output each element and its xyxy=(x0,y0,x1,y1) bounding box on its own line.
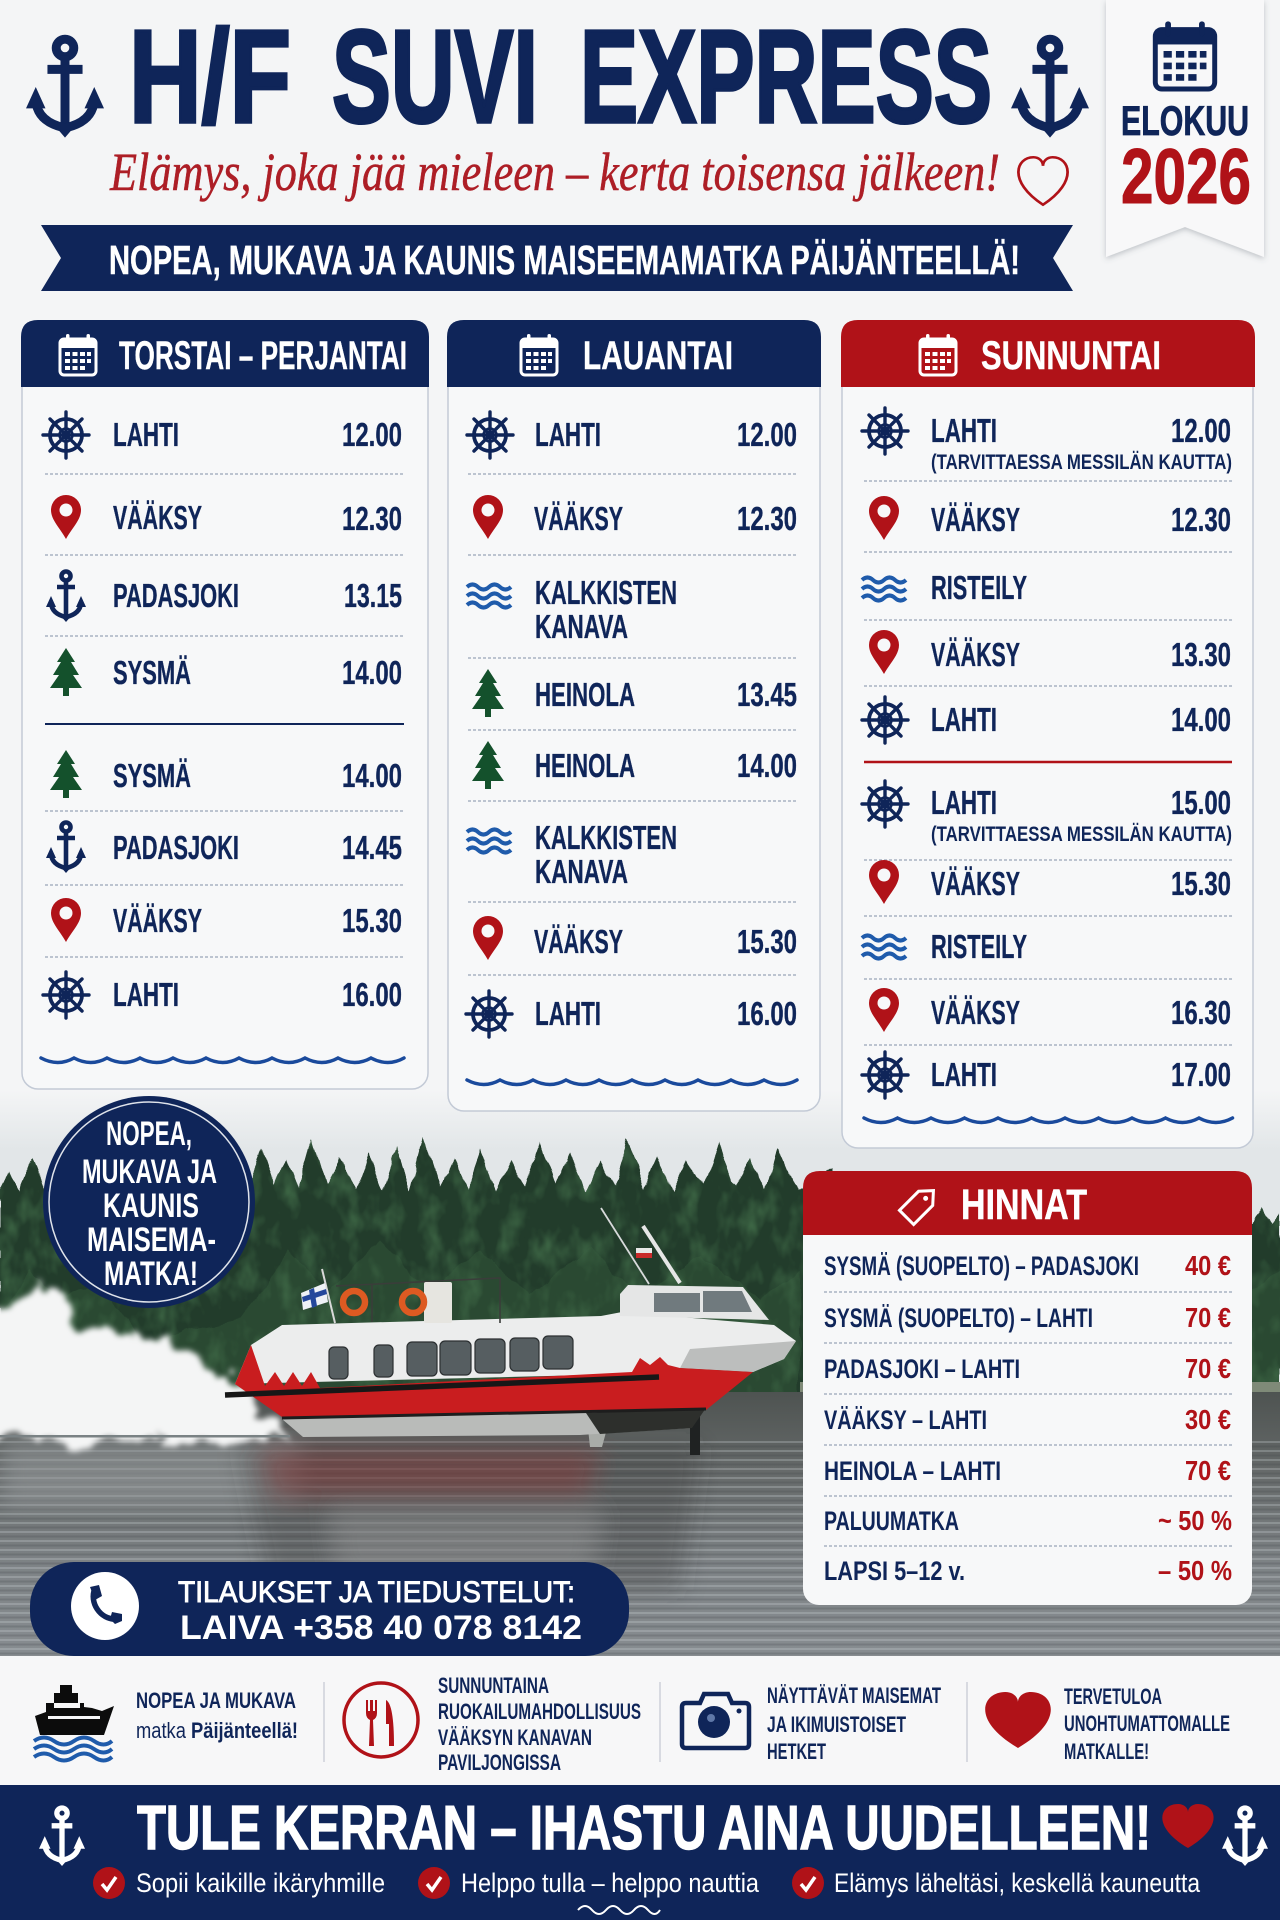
price row: HEINOLA – LAHTI xyxy=(824,1456,1001,1486)
feature text: MATKALLE! xyxy=(1064,1739,1149,1764)
row: 16.00 xyxy=(342,976,402,1013)
row: PADASJOKI xyxy=(113,577,239,614)
badge: circle slogan: NOPEA, xyxy=(106,1115,192,1153)
badge: circle slogan: MATKA! xyxy=(104,1255,198,1293)
icon: heart outline xyxy=(1018,157,1068,205)
icon: heart xyxy=(985,1692,1051,1748)
row xyxy=(473,495,797,539)
title: EXPRESS xyxy=(580,3,992,150)
price row xyxy=(824,1353,1231,1384)
water splash xyxy=(0,1276,290,1442)
price row: LAPSI 5–12 v. xyxy=(824,1556,965,1586)
lifebuoys xyxy=(343,1291,424,1313)
row xyxy=(51,495,402,539)
icon: footer heart xyxy=(1162,1804,1214,1848)
row: HEINOLA xyxy=(535,676,635,713)
phone pill: LAIVA +358 40 078 8142 xyxy=(180,1609,582,1647)
feature text: PAVILJONGISSA xyxy=(438,1750,561,1775)
row: VÄÄKSY xyxy=(534,500,623,537)
panel header: SUNNUNTAI xyxy=(981,334,1161,378)
icon: calendar xyxy=(1155,21,1215,89)
row xyxy=(46,572,402,622)
price row: ~ 50 % xyxy=(1158,1505,1232,1536)
row: LAHTI xyxy=(535,995,601,1032)
row: VÄÄKSY xyxy=(931,636,1020,673)
finnish flag xyxy=(301,1283,328,1310)
feature text xyxy=(136,1688,298,1743)
photo: hydrofoil on lake xyxy=(0,1090,1280,1660)
icon: right anchor xyxy=(1011,39,1089,138)
icon: left anchor xyxy=(26,39,104,138)
row xyxy=(862,408,1232,474)
icon: price tag xyxy=(899,1183,941,1225)
row: HEINOLA xyxy=(535,747,635,784)
icon: ship xyxy=(34,1685,114,1760)
prices header: HINNAT xyxy=(961,1181,1087,1229)
row xyxy=(467,819,677,890)
row: 13.45 xyxy=(737,676,797,713)
row: 12.30 xyxy=(1171,501,1231,538)
row: LAHTI xyxy=(931,701,997,738)
row xyxy=(43,412,402,458)
price row: PALUUMATKA xyxy=(824,1506,959,1536)
feature text: HETKET xyxy=(767,1739,826,1764)
row: 13.15 xyxy=(344,577,402,614)
row xyxy=(869,630,1231,674)
row xyxy=(50,750,402,798)
title xyxy=(129,3,992,150)
row xyxy=(862,569,1027,606)
feature text xyxy=(438,1673,641,1775)
price row: VÄÄKSY – LAHTI xyxy=(824,1405,987,1435)
price row: 70 € xyxy=(1185,1302,1231,1333)
footer band xyxy=(0,1785,1280,1920)
feature text xyxy=(1064,1684,1230,1764)
row: SYSMÄ xyxy=(113,654,191,691)
script tagline: Elämys, joka jää mieleen – kerta toisensa jälkeen! xyxy=(109,142,1000,202)
row xyxy=(869,496,1231,540)
row: 12.00 xyxy=(737,416,797,453)
icon: camera xyxy=(682,1694,749,1748)
row: 15.30 xyxy=(737,923,797,960)
row: KALKKISTEN xyxy=(535,574,677,611)
panel header xyxy=(21,320,429,387)
row: PADASJOKI xyxy=(113,829,239,866)
row: 15.30 xyxy=(1171,865,1231,902)
panel header xyxy=(447,320,821,387)
row xyxy=(862,928,1027,965)
row: RISTEILY xyxy=(931,569,1027,606)
row xyxy=(472,669,797,717)
check item: Elämys läheltäsi, keskellä kauneutta xyxy=(834,1868,1201,1898)
price row: 70 € xyxy=(1185,1455,1231,1486)
row xyxy=(473,916,797,960)
row xyxy=(862,781,1232,846)
panel: lauantai xyxy=(447,320,821,1111)
row: 17.00 xyxy=(1171,1056,1231,1093)
row xyxy=(467,412,797,458)
row xyxy=(472,741,797,789)
row: VÄÄKSY xyxy=(113,902,202,939)
boat reflection xyxy=(240,1445,700,1590)
badge: circle slogan: MUKAVA JA xyxy=(82,1153,217,1191)
row xyxy=(862,1052,1231,1098)
price row: 70 € xyxy=(1185,1353,1231,1384)
banner xyxy=(41,225,1073,291)
panel header xyxy=(841,320,1255,387)
row: LAHTI xyxy=(113,416,179,453)
badge: circle slogan xyxy=(43,1096,255,1308)
row: VÄÄKSY xyxy=(931,994,1020,1031)
row: VÄÄKSY xyxy=(931,501,1020,538)
row: 14.00 xyxy=(737,747,797,784)
row: VÄÄKSY xyxy=(534,923,623,960)
feature text: RUOKAILUMAHDOLLISUUS xyxy=(438,1699,641,1724)
hydrofoil boat xyxy=(225,1208,796,1455)
row: 12.00 xyxy=(342,416,402,453)
row: KANAVA xyxy=(535,853,628,890)
row xyxy=(46,822,402,873)
header block xyxy=(26,3,1089,291)
row: 16.00 xyxy=(737,995,797,1032)
phone pill xyxy=(30,1562,629,1656)
row: 14.45 xyxy=(342,829,402,866)
row: LAHTI xyxy=(931,412,997,449)
row xyxy=(869,860,1231,904)
badge: circle slogan: MAISEMA- xyxy=(87,1221,216,1259)
feature text xyxy=(767,1683,941,1764)
price row: PADASJOKI – LAHTI xyxy=(824,1354,1020,1384)
row: 14.00 xyxy=(342,757,402,794)
feature text: VÄÄKSYN KANAVAN xyxy=(438,1725,592,1750)
phone pill: TILAUKSET JA TIEDUSTELUT: xyxy=(178,1576,575,1609)
price row xyxy=(824,1555,1232,1586)
price row xyxy=(824,1505,1232,1536)
row xyxy=(43,972,402,1018)
panel header: LAUANTAI xyxy=(583,334,733,378)
row: LAHTI xyxy=(535,416,601,453)
price row: – 50 % xyxy=(1158,1555,1232,1586)
row: KANAVA xyxy=(535,608,628,645)
prices header xyxy=(803,1171,1252,1235)
row: 13.30 xyxy=(1171,636,1231,673)
panel: hinnat prices xyxy=(803,1171,1252,1605)
row: LAHTI xyxy=(113,976,179,1013)
badge: circle slogan: KAUNIS xyxy=(103,1187,199,1225)
row: 12.30 xyxy=(737,500,797,537)
feature text: SUNNUNTAINA xyxy=(438,1673,549,1698)
row: SYSMÄ xyxy=(113,757,191,794)
feature text: NÄYTTÄVÄT MAISEMAT xyxy=(767,1683,941,1708)
boat windows xyxy=(329,1336,573,1379)
features band xyxy=(0,1656,1280,1785)
panel: sunnuntai xyxy=(841,320,1255,1148)
feature text: TERVETULOA xyxy=(1064,1684,1162,1709)
panel: torstai-perjantai xyxy=(21,320,429,1089)
row xyxy=(467,574,677,645)
row xyxy=(50,648,402,696)
title: SUVI xyxy=(332,3,538,150)
price row xyxy=(824,1404,1231,1435)
row: KALKKISTEN xyxy=(535,819,677,856)
icon: plate and cutlery xyxy=(344,1683,418,1757)
row: 16.30 xyxy=(1171,994,1231,1031)
row xyxy=(869,988,1231,1032)
title: H/F xyxy=(129,3,291,150)
row xyxy=(466,991,797,1037)
title ribbon: date xyxy=(1106,0,1264,257)
icon: footer anchor left xyxy=(39,1808,85,1866)
price row: 30 € xyxy=(1185,1404,1231,1435)
price row: SYSMÄ (SUOPELTO) – LAHTI xyxy=(824,1303,1093,1333)
check item: Helppo tulla – helppo nauttia xyxy=(461,1868,760,1898)
price row xyxy=(824,1455,1231,1486)
row: VÄÄKSY xyxy=(931,865,1020,902)
panel header: TORSTAI – PERJANTAI xyxy=(119,334,407,378)
row: 12.00 xyxy=(1171,412,1231,449)
price row: 40 € xyxy=(1185,1250,1231,1281)
icon: footer anchor right xyxy=(1222,1808,1268,1866)
row: LAHTI xyxy=(931,1056,997,1093)
check item: Sopii kaikille ikäryhmille xyxy=(136,1868,385,1898)
icon: phone xyxy=(71,1572,139,1640)
feature text: JA IKIMUISTOISET xyxy=(767,1712,906,1737)
row xyxy=(51,898,402,942)
price row: SYSMÄ (SUOPELTO) – PADASJOKI xyxy=(824,1251,1139,1281)
row xyxy=(862,697,1231,743)
row: LAHTI xyxy=(931,784,997,821)
row: 15.30 xyxy=(342,902,402,939)
feature text: NOPEA JA MUKAVA xyxy=(136,1688,296,1713)
row: 14.00 xyxy=(342,654,402,691)
feature text: matka Päijänteellä! xyxy=(136,1718,298,1743)
row: 14.00 xyxy=(1171,701,1231,738)
row: RISTEILY xyxy=(931,928,1027,965)
row: 15.00 xyxy=(1171,784,1231,821)
row: 12.30 xyxy=(342,500,402,537)
row: VÄÄKSY xyxy=(113,499,202,536)
